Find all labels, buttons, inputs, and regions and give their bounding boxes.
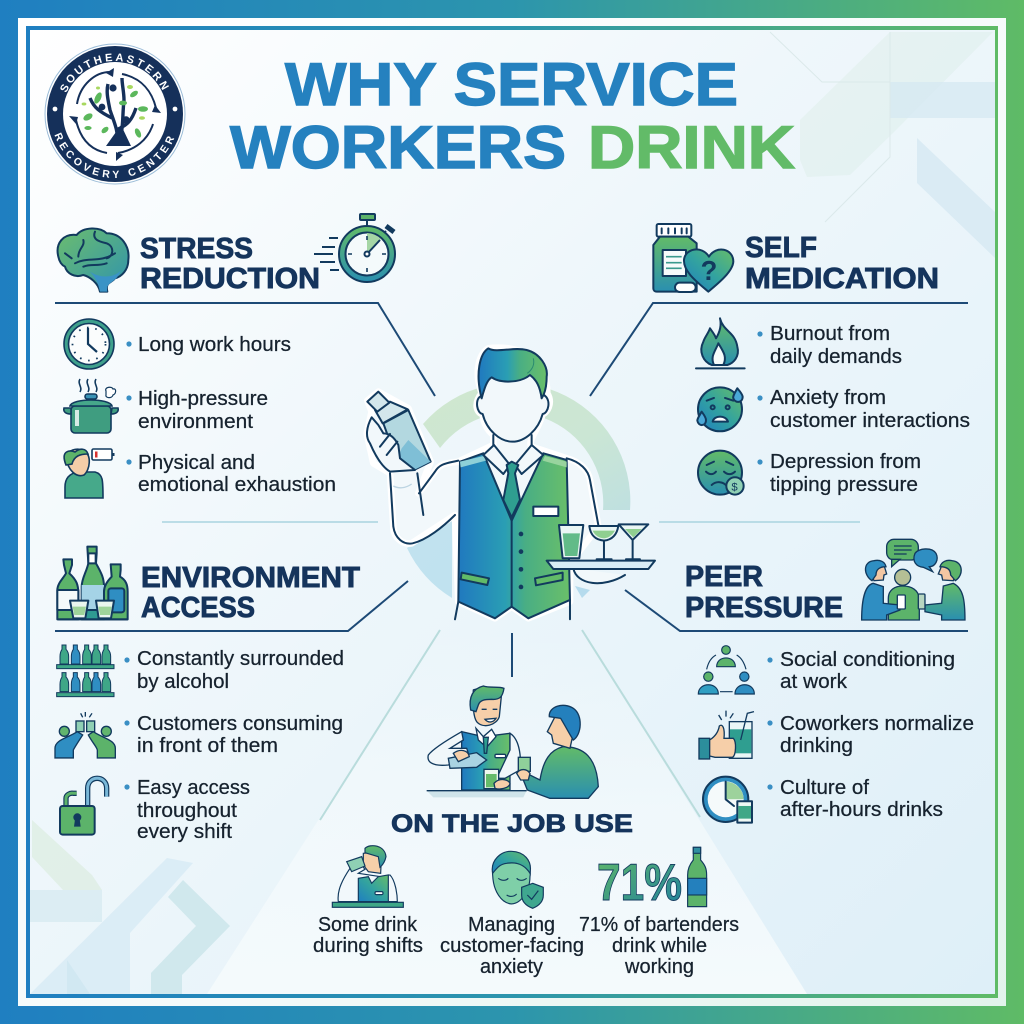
text: long work hours: Long work hours [138, 334, 291, 356]
icon: anxious face [697, 387, 743, 431]
item: culture of after-hours drinks [703, 777, 943, 823]
text: some drink during shifts [313, 914, 423, 957]
icon: brain [58, 229, 129, 292]
item: anxiety [697, 387, 970, 432]
divider: environment [55, 581, 408, 631]
title: DRINK [588, 114, 795, 181]
vest [455, 445, 570, 619]
text: depression [757, 451, 921, 496]
text: managing customer-facing anxiety: Managing [468, 914, 555, 936]
icon: sad face with coin: $ [731, 481, 738, 493]
shaker [367, 392, 431, 472]
heading: on the job use: ON THE JOB USE [391, 810, 633, 838]
heading: peer pressure: PEER [685, 561, 763, 593]
stat: 71 percent: 71% [597, 854, 682, 912]
icon: pot [64, 379, 118, 433]
bartender left arm [390, 461, 458, 544]
item: easy access [60, 777, 250, 843]
text: easy access: every shift [137, 821, 232, 843]
item: long work hours [64, 319, 291, 369]
text: managing customer-facing anxiety [440, 914, 584, 978]
text: anxiety: customer interactions [770, 410, 970, 432]
heading: stress reduction: STRESS [140, 233, 253, 265]
icon: stopwatch [314, 214, 395, 282]
text: coworkers normalize [767, 713, 974, 757]
item: customers consuming [55, 712, 343, 758]
heading: environment access [141, 562, 360, 624]
icon: worker drinking [332, 846, 403, 907]
panel: stress reduction [55, 214, 435, 498]
lighter central bottom wedge [207, 630, 807, 994]
text: 71% of bartenders [579, 914, 739, 978]
logo: Southeastern Recovery Center: SOUTHEASTERN [60, 54, 169, 92]
item: physical and emotional exhaustion [64, 449, 336, 498]
text: easy access: throughout [137, 800, 237, 822]
text: high-pressure environment [126, 388, 268, 433]
text: anxiety: Anxiety from [770, 387, 886, 409]
icon: thumbs up and drink [699, 711, 754, 759]
text: culture of after-hours drinks [767, 777, 943, 821]
item: some drink during shifts [313, 846, 423, 957]
text: high-pressure environment: High-pressure [138, 388, 268, 410]
icon: bottle [688, 847, 707, 907]
text: physical and emotional exhaustion [126, 452, 336, 496]
heading: environment access: ENVIRONMENT [141, 562, 360, 594]
text: burnout: daily demands [770, 346, 902, 368]
item: social conditioning [698, 646, 955, 694]
item: surrounded by alcohol [57, 645, 344, 697]
text: depression: Depression from [770, 451, 921, 473]
text: 71% of bartenders: 71% of bartenders [579, 914, 739, 936]
title: WORKERS [230, 114, 566, 181]
panel: self medication [590, 224, 970, 496]
icon: shelves of bottles [57, 645, 114, 697]
panel: environment access [55, 547, 408, 843]
icon: pill bottle and heart [653, 224, 733, 292]
divider: peer [625, 590, 968, 631]
icon: people toasting [55, 712, 115, 758]
text: customers consuming [124, 713, 343, 757]
icon: clock and glass [703, 777, 752, 823]
text: surrounded by alcohol: Constantly surrounded [137, 648, 344, 670]
bartender right arm [567, 458, 598, 525]
heading: self medication: MEDICATION [745, 263, 939, 295]
heading: peer pressure [685, 561, 843, 624]
text: customers consuming: in front of them [137, 735, 278, 757]
text: anxiety [757, 387, 970, 432]
text: culture of after-hours drinks: after-hours drinks [780, 799, 943, 821]
divider: self [590, 303, 968, 396]
text: social conditioning: Social conditioning [780, 649, 955, 671]
item: coworkers normalize [699, 711, 974, 759]
connector lines to center [162, 522, 860, 820]
item: depression [698, 451, 921, 496]
background shapes top right [770, 32, 995, 258]
icon: people network [698, 646, 754, 694]
text: 71% of bartenders: working [624, 956, 694, 978]
text: social conditioning [767, 649, 955, 693]
heading: environment access: ACCESS [141, 592, 255, 624]
hair and face [477, 348, 548, 445]
text: high-pressure environment: environment [138, 411, 253, 433]
text: culture of after-hours drinks: Culture of [780, 777, 869, 799]
text: some drink during shifts: during shifts [313, 935, 423, 957]
icon: flame [696, 318, 745, 368]
text: burnout [757, 323, 902, 368]
heading: stress reduction [140, 233, 320, 295]
item: burnout [696, 318, 902, 368]
text: coworkers normalize: drinking [780, 735, 853, 757]
background shapes bottom left [30, 820, 230, 994]
text: burnout: Burnout from [770, 323, 890, 345]
heading: stress reduction: REDUCTION [140, 263, 320, 295]
tray with glasses [547, 524, 655, 583]
text: physical and emotional exhaustion: emotional exhaustion [138, 474, 336, 496]
icon: bottles and shot glasses [57, 547, 128, 619]
logo: Southeastern Recovery Center [44, 44, 186, 184]
illustration: bartender serving customer [427, 686, 598, 798]
text: easy access: Easy access [137, 777, 250, 799]
icon: open padlock [60, 778, 107, 835]
text: managing customer-facing anxiety: anxiety [480, 956, 543, 978]
item: managing customer-facing anxiety [440, 851, 584, 978]
panel: peer pressure [625, 539, 974, 823]
icon: sad face with coin [698, 451, 744, 495]
icon: pill bottle and heart: ? [701, 255, 717, 286]
text: some drink during shifts: Some drink [318, 914, 418, 936]
text: managing customer-facing anxiety: customer-facing [440, 935, 584, 957]
text: coworkers normalize: Coworkers normalize [780, 713, 974, 735]
heading: self medication [745, 232, 939, 295]
text: physical and emotional exhaustion: Physical and [138, 452, 255, 474]
icon: three people talking [862, 539, 965, 620]
central bartender figure [367, 348, 655, 619]
text: surrounded by alcohol: by alcohol [137, 671, 229, 693]
item: high-pressure environment [64, 379, 268, 433]
icon: calm face with shield [492, 851, 543, 908]
heading: self medication: SELF [745, 232, 817, 264]
text: easy access [124, 777, 250, 843]
panel: on the job use [313, 686, 739, 978]
text: 71% of bartenders: drink while [612, 935, 707, 957]
icon: clock [64, 319, 114, 369]
divider: stress [55, 303, 435, 396]
item: 71% of bartenders [579, 847, 739, 978]
logo: Southeastern Recovery Center: RECOVERY CENTER [54, 132, 174, 178]
text: depression: tipping pressure [770, 474, 918, 496]
text: customers consuming: Customers consuming [137, 713, 343, 735]
text: social conditioning: at work [780, 671, 848, 693]
title [230, 51, 795, 181]
text: surrounded by alcohol [124, 648, 344, 693]
heading: peer pressure: PRESSURE [685, 592, 843, 624]
icon: tired person with battery [64, 449, 114, 498]
title: WHY SERVICE [285, 51, 738, 118]
center background ring [407, 383, 630, 598]
